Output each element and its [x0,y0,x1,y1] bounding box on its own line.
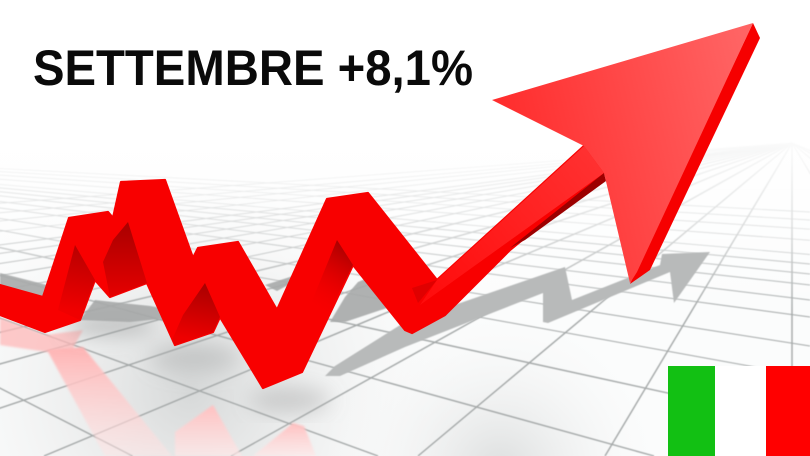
cast shadow: left part of the line [0,262,405,322]
arrow shaft: dark underside [510,173,606,248]
line: shaded fold 1 [58,245,95,320]
zigzag red arrow [0,23,760,388]
grid fade toward the horizon [0,130,810,310]
arrow head: lit top face [492,23,753,283]
line: solid zigzag body [0,146,604,388]
cast shadow: right part of the line [325,252,710,376]
arrow shaft: lit upper face [420,146,604,305]
title: SETTEMBRE +8,1% [33,40,473,96]
arrow head: side face [630,23,760,284]
line: valley crease near the last bend [412,280,437,303]
floor: perspective grid [0,143,810,456]
soft contact shadows [65,315,330,413]
reflection: pink mirror of the line on the floor [0,318,316,456]
line: shaded fold 4 [300,240,353,330]
line: shaded fold 3 [172,283,220,345]
floor: shaded perspective surface [0,140,810,456]
line: shaded fold 2 [103,222,147,297]
icon: Italian flag [668,366,810,456]
